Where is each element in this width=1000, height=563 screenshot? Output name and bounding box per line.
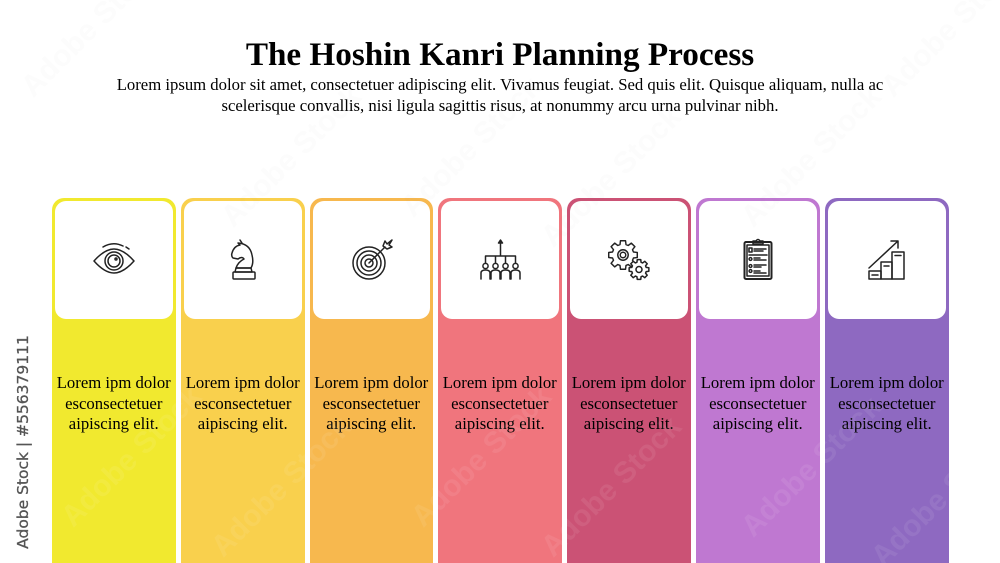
icon: growth bars with arrow (828, 201, 946, 318)
text block 4: Lorem ipm dolor (443, 373, 557, 392)
text block 5: aipiscing elit. (584, 414, 674, 433)
text block 2: aipiscing elit. (198, 414, 288, 433)
text block 5 (572, 373, 686, 433)
text block 1 (57, 373, 171, 433)
text block 6: Lorem ipm dolor (701, 373, 815, 392)
text block 5: esconsectetuer (580, 394, 677, 413)
watermark overlay: Adobe Stock (215, 80, 368, 233)
text block 2 (186, 373, 300, 433)
text block 3 (314, 373, 428, 433)
watermark overlay: Adobe Stock (735, 390, 888, 543)
watermark overlay: Adobe Stock (205, 410, 358, 563)
watermark overlay: Adobe Stock (535, 410, 688, 563)
panel: column 4 team alignment (438, 198, 562, 563)
panel: column 5 process (567, 198, 690, 563)
icon: chess knight (184, 201, 302, 318)
text block 2: Lorem ipm dolor (186, 373, 300, 392)
text block 7: Lorem ipm dolor (830, 373, 944, 392)
stock credit vertical label: Adobe Stock | #556379111 (14, 335, 32, 548)
text block 1: aipiscing elit. (69, 414, 159, 433)
text block 7 (830, 373, 944, 433)
text block 1: esconsectetuer (65, 394, 162, 413)
text block 6 (701, 373, 815, 433)
text block 4: esconsectetuer (451, 394, 548, 413)
icon: clipboard checklist (699, 201, 816, 318)
subtitle text block: Lorem ipsum dolor sit amet, consectetuer adipiscing elit. Vivamus feugiat. Sed quis elit. Quisque aliquam, nulla ac (117, 75, 883, 94)
panel: column 1 vision (52, 198, 176, 563)
text block 4 (443, 373, 557, 433)
panel: column 7 growth (825, 198, 948, 563)
text block 4: aipiscing elit. (455, 414, 545, 433)
text block 7: aipiscing elit. (842, 414, 932, 433)
panel: column 6 review (696, 198, 820, 563)
icon: team hierarchy with up arrow (441, 201, 558, 318)
subtitle text block: scelerisque convallis, nisi ligula sagittis risus, at nonummy arcu urna pulvinar nibh. (221, 96, 779, 115)
panel: column 2 strategy (181, 198, 304, 563)
watermark overlay: Adobe Stock (405, 380, 558, 533)
watermark overlay: Adobe Stock (735, 80, 888, 233)
watermark overlay: Adobe Stock (55, 380, 208, 533)
text block 6: aipiscing elit. (713, 414, 803, 433)
text block 3: esconsectetuer (323, 394, 420, 413)
text block 1: Lorem ipm dolor (57, 373, 171, 392)
watermark overlay: Adobe Stock (535, 100, 688, 253)
watermark overlay: Adobe Stock (395, 70, 548, 223)
icon: target with arrow (312, 201, 430, 318)
panel: column 3 target (310, 198, 433, 563)
text block 6: esconsectetuer (709, 394, 806, 413)
text block 7: esconsectetuer (838, 394, 935, 413)
text block 3: aipiscing elit. (326, 414, 416, 433)
icon: eye (55, 201, 172, 318)
icon: gears (570, 201, 688, 318)
subtitle text block (117, 75, 883, 115)
text block 5: Lorem ipm dolor (572, 373, 686, 392)
text block 3: Lorem ipm dolor (314, 373, 428, 392)
title: The Hoshin Kanri Planning Process (246, 36, 754, 73)
text block 2: esconsectetuer (194, 394, 291, 413)
